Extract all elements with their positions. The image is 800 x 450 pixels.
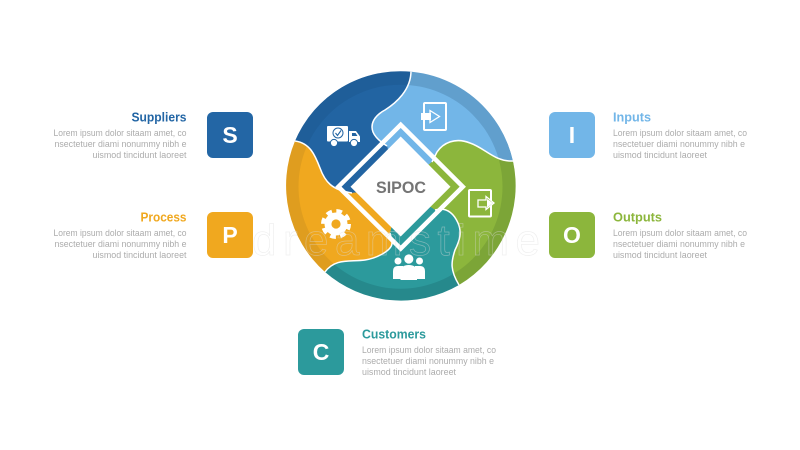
icon: truck [327, 126, 360, 147]
heading: inputs: Inputs [613, 110, 651, 124]
panel: outputs [549, 210, 747, 260]
text block: suppliers: Lorem ipsum dolor sitaam amet, co [54, 128, 186, 138]
text block: outputs: Lorem ipsum dolor sitaam amet, co [613, 228, 747, 238]
badge: C: C [313, 339, 329, 365]
badge: O [549, 212, 595, 258]
segment: customers [325, 206, 460, 301]
panel: process [54, 210, 253, 260]
icon: door with arrow in [421, 103, 446, 130]
watermark: dreamstime [252, 216, 540, 265]
segment: suppliers [295, 71, 411, 193]
badge: S: S [222, 122, 238, 148]
panel: customers [298, 326, 496, 377]
badge: P: P [222, 222, 238, 248]
badge: O: O [563, 222, 581, 248]
text block: inputs: Lorem ipsum dolor sitaam amet, co [613, 128, 747, 138]
icon: gear [323, 211, 349, 237]
badge: P [207, 212, 253, 258]
text block: outputs: nsectetuer diami nonummy nibh e [613, 239, 745, 249]
text block: inputs [613, 128, 747, 160]
badge: I [549, 112, 595, 158]
panel: suppliers [54, 110, 253, 160]
text block: customers [362, 345, 496, 377]
diamond center [350, 136, 450, 236]
text block: suppliers: nsectetuer diami nonummy nibh e [54, 139, 186, 149]
heading: outputs: Outputs [613, 210, 662, 224]
icon: door with arrow out [469, 190, 494, 216]
badge: I: I [569, 122, 575, 148]
heading: suppliers: Suppliers [132, 110, 186, 124]
text block: outputs [613, 228, 747, 260]
segment: process [286, 141, 400, 272]
icon: people [393, 254, 425, 280]
text block: inputs: uismod tincidunt laoreet [613, 150, 707, 160]
text block: process: uismod tincidunt laoreet [92, 250, 187, 260]
text block: suppliers [54, 128, 187, 160]
segment: outputs [428, 141, 516, 285]
badge: S [207, 112, 253, 158]
diamond outer white ring [338, 125, 463, 249]
segment: inputs [372, 72, 513, 164]
text block: process: nsectetuer diami nonummy nibh e [54, 239, 186, 249]
SIPOC circular diagram [286, 71, 516, 301]
badge: C [298, 329, 344, 375]
text block: customers: uismod tincidunt laoreet [362, 367, 456, 377]
text block: process: Lorem ipsum dolor sitaam amet, co [54, 228, 186, 238]
center label: SIPOC [376, 178, 426, 197]
heading: customers: Customers [362, 326, 426, 342]
text block: customers: Lorem ipsum dolor sitaam amet, co [362, 345, 496, 355]
text block: customers: nsectetuer diami nonummy nibh e [362, 356, 494, 366]
text block: suppliers: uismod tincidunt laoreet [92, 150, 187, 160]
panel: inputs [549, 110, 747, 160]
heading: process: Process [140, 210, 186, 224]
text block: inputs: nsectetuer diami nonummy nibh e [613, 139, 745, 149]
text block: process [54, 228, 187, 260]
text block: outputs: uismod tincidunt laoreet [613, 250, 707, 260]
